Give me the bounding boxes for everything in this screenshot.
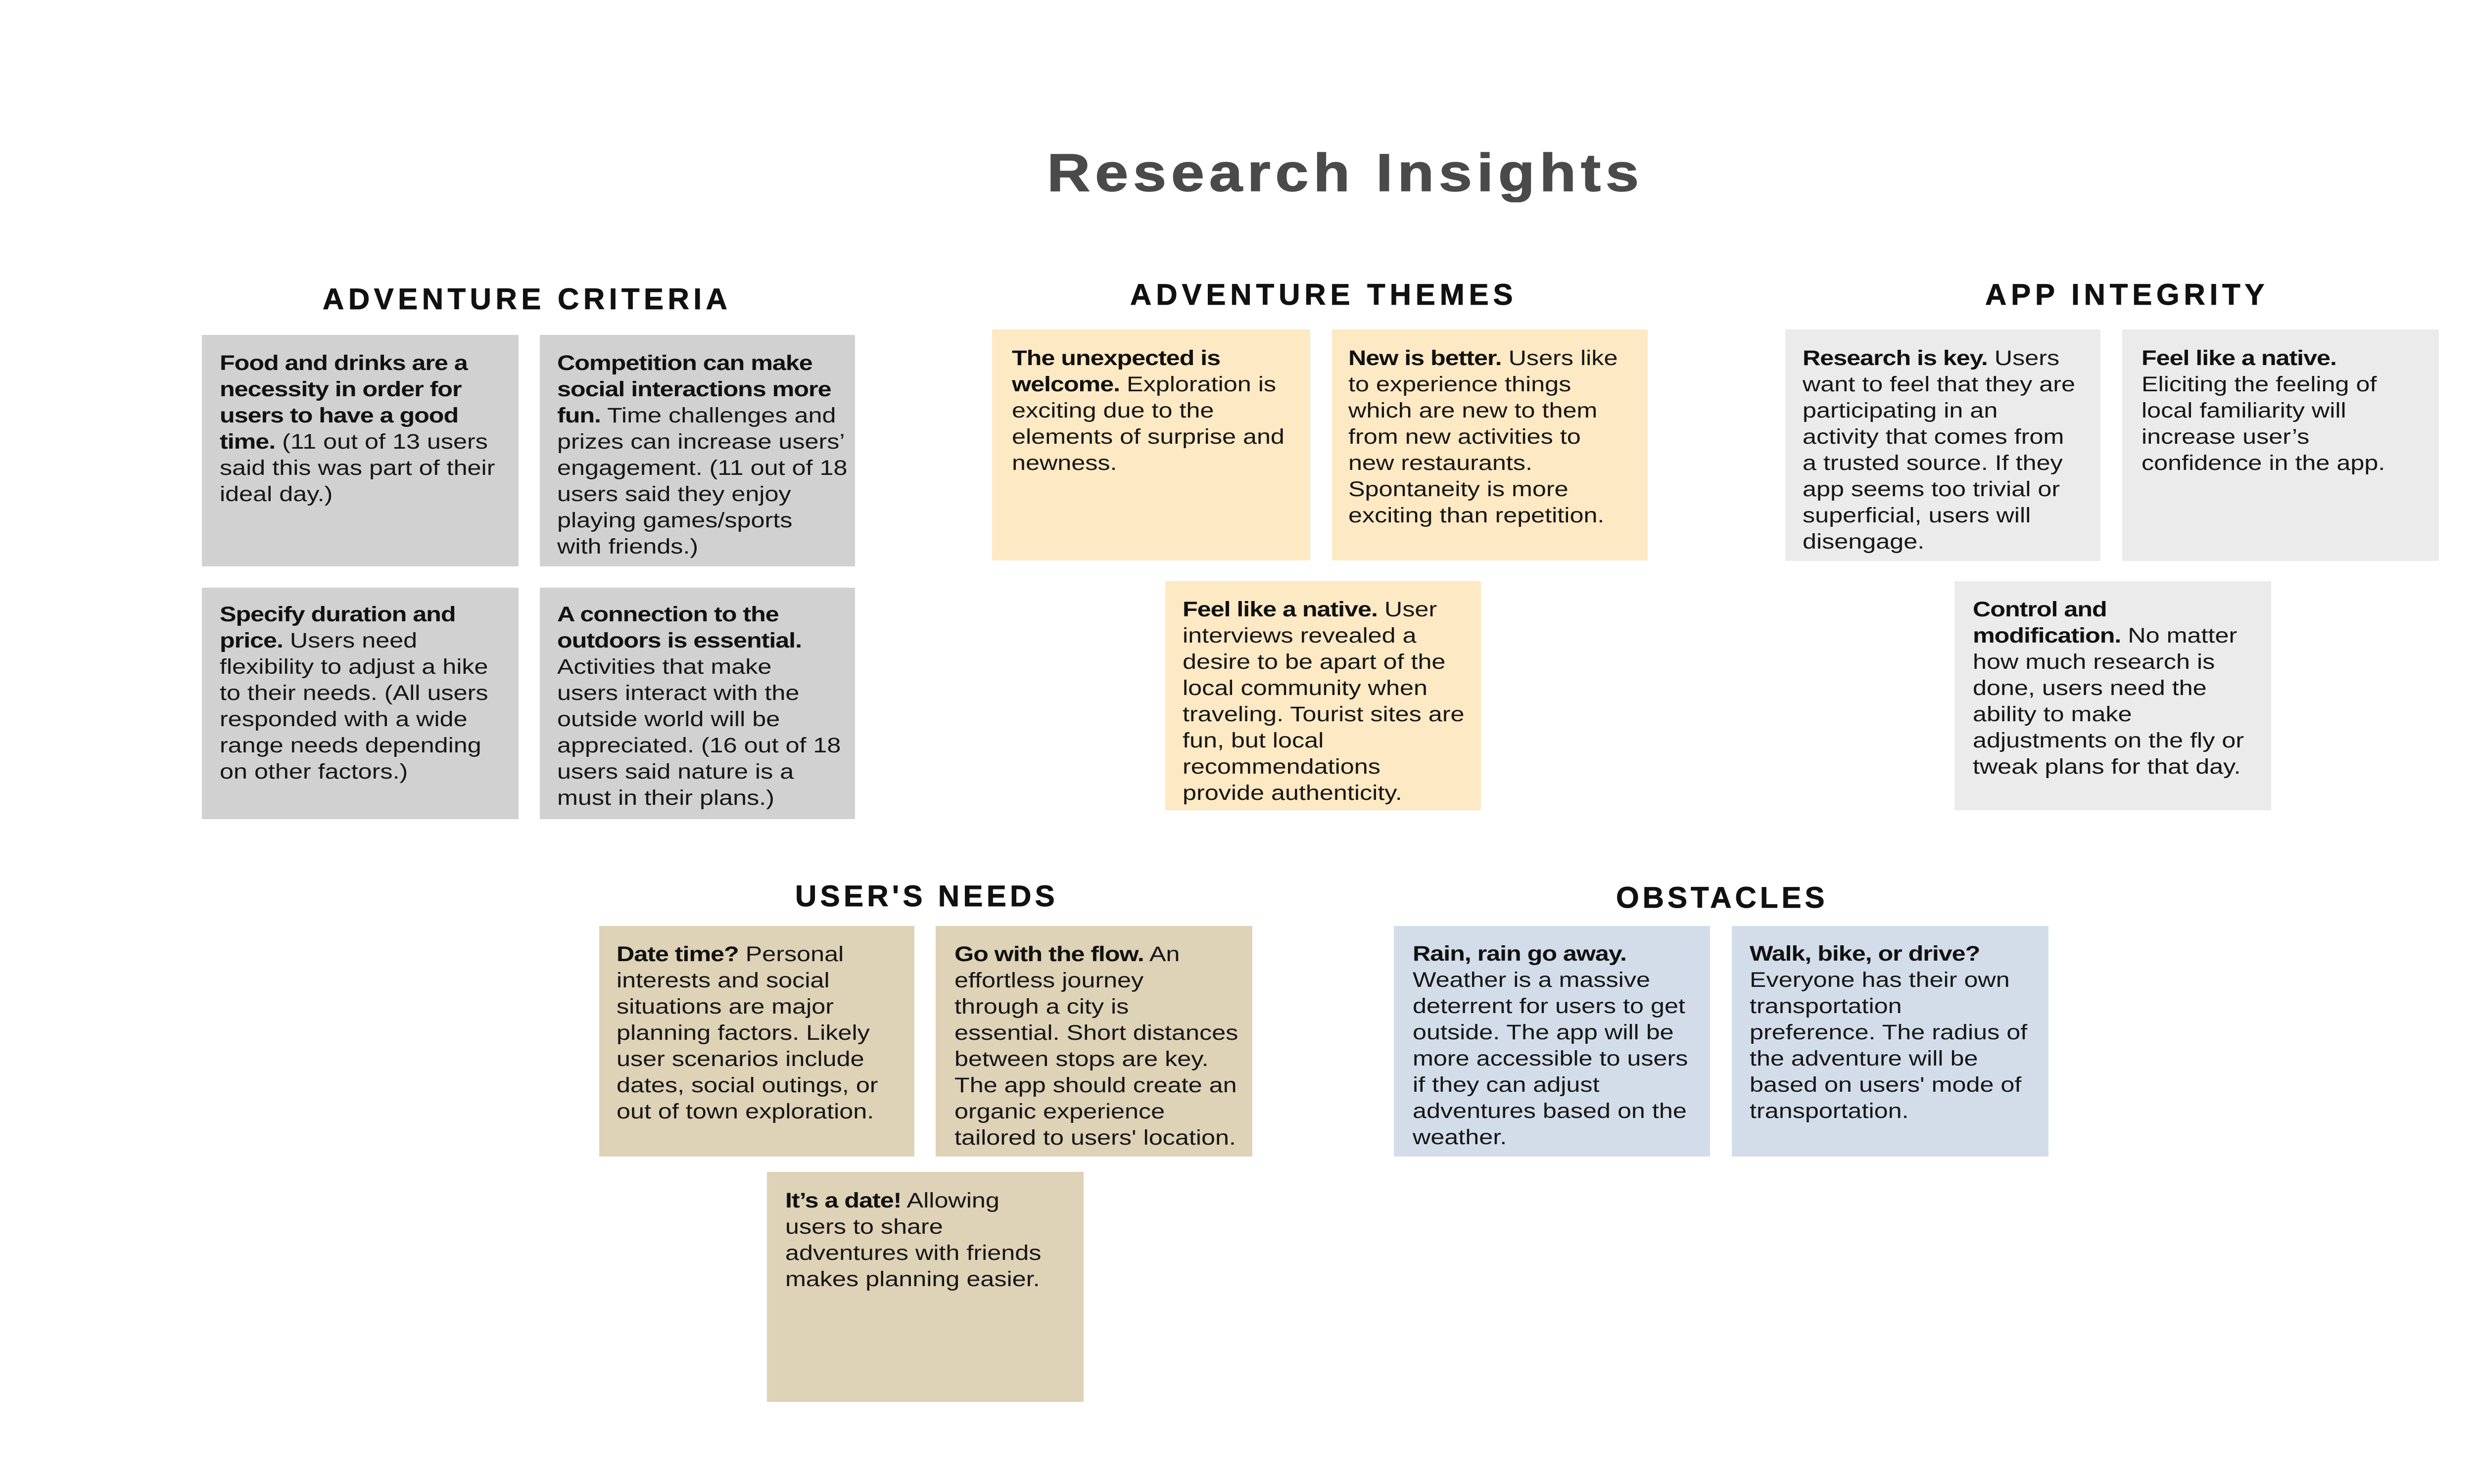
text: food and drinks: ideal day.) [220,482,333,506]
title: Research Insights [1047,142,1644,202]
text: new is better: Spontaneity is more [1348,477,1569,501]
text: new is better: new restaurants. [1348,451,1532,475]
text: new is better: exciting than repetition. [1348,504,1604,527]
heading: obstacles: OBSTACLES [1616,881,1828,914]
text: control and modification: tweak plans for that day. [1973,755,2241,779]
text: it's a date: adventures with friends [785,1241,1041,1265]
card: competition [540,335,855,566]
text: outdoors: must in their plans.) [557,786,774,810]
text: date time: situations are major [617,995,834,1019]
heading: adventure themes: ADVENTURE THEMES [1130,278,1517,311]
card: date time [599,926,914,1157]
heading: user's needs: USER'S NEEDS [795,880,1058,913]
card: feel like a native [2122,329,2439,561]
text: new is better: New is better. Users like [1348,346,1618,370]
text: outdoors: A connection to the [557,603,779,626]
text: it's a date: makes planning easier. [785,1267,1040,1291]
text: walk bike drive [1750,942,2028,1123]
card: outdoors [540,588,855,819]
text: feel like a native: fun, but local [1183,729,1324,752]
text: competition: Competition can make [557,351,812,375]
text: rain: if they can adjust [1413,1073,1600,1097]
text: date time: dates, social outings, or [617,1073,878,1097]
text: walk bike drive: Everyone has their own [1750,968,2010,992]
text: new is better: from new activities to [1348,425,1581,449]
text: new is better: to experience things [1348,372,1571,396]
card: control and modification [1954,581,2271,810]
panel: obstacles [1394,881,2048,1157]
text: competition: playing games/sports [557,509,792,532]
text: competition: with friends.) [557,535,698,558]
heading: app integrity: APP INTEGRITY [1985,278,2269,311]
text: rain: more accessible to users [1413,1047,1688,1070]
text: the unexpected: The unexpected is [1012,346,1220,370]
text: date time: user scenarios include [617,1047,864,1071]
text: food and drinks [220,351,495,506]
text: it's a date [785,1189,1041,1291]
text: feel like a native: desire to be apart of the [1183,650,1445,674]
text: rain: weather. [1413,1125,1507,1149]
text: control and modification: adjustments on the fly or [1973,729,2244,752]
text: feel like a native: increase user’s [2141,425,2309,449]
text: competition: users said they enjoy [557,482,791,506]
card: it's a date [767,1172,1084,1402]
text: research is key [1803,346,2075,554]
text: feel like a native: recommendations [1183,755,1380,779]
text: duration and price: responded with a wide [220,707,468,731]
panel: app integrity [1785,278,2439,810]
text: walk bike drive: transportation. [1750,1099,1909,1123]
text: rain: outside. The app will be [1413,1020,1674,1044]
card: food and drinks [202,335,519,566]
text: go with the flow: The app should create an [954,1073,1237,1097]
text: outdoors [557,603,841,810]
text: outdoors: Activities that make [557,655,771,679]
heading: adventure criteria: ADVENTURE CRITERIA [323,282,731,316]
text: walk bike drive: preference. The radius of [1750,1020,2027,1044]
text: feel like a native: local familiarity will [2141,399,2346,422]
text: feel like a native [2141,346,2385,475]
text: walk bike drive: transportation [1750,994,1902,1018]
text: go with the flow: between stops are key. [954,1047,1209,1071]
text: rain: adventures based on the [1413,1099,1687,1123]
card: new is better [1332,329,1648,560]
text: research is key: a trusted source. If they [1803,451,2063,475]
card: research is key [1785,329,2100,561]
card: feel like a native [1165,581,1481,810]
text: food and drinks: users to have a good [220,404,458,427]
text: date time: Date time? Personal [617,942,844,966]
text: outdoors: users said nature is a [557,760,794,784]
text: duration and price: on other factors.) [220,760,408,784]
text: date time: interests and social [617,969,830,992]
text: research is key: want to feel that they are [1803,372,2075,396]
card: walk bike drive [1732,926,2048,1157]
text: walk bike drive: the adventure will be [1750,1047,1978,1070]
text: feel like a native: local community when [1183,676,1427,700]
text: duration and price: range needs depending [220,734,481,757]
text: research is key: superficial, users will [1803,504,2031,527]
text: it's a date: It’s a date! Allowing [785,1189,999,1212]
panel: adventure criteria [202,282,855,819]
text: feel like a native: confidence in the app. [2141,451,2385,475]
text: go with the flow: effortless journey [954,969,1143,992]
text: walk bike drive: Walk, bike, or drive? [1750,942,1980,966]
panel: adventure themes [992,278,1648,810]
text: duration and price: price. Users need [220,629,417,652]
text: date time: out of town exploration. [617,1100,874,1123]
text: walk bike drive: based on users' mode of [1750,1073,2021,1097]
text: rain: Rain, rain go away. [1413,942,1626,966]
text: outdoors: outside world will be [557,707,780,731]
card: go with the flow [936,926,1252,1157]
text: feel like a native: Feel like a native. [2141,346,2336,370]
text: rain: deterrent for users to get [1413,994,1685,1018]
text: new is better: which are new to them [1348,399,1597,422]
text: competition: social interactions more [557,377,831,401]
text: food and drinks: said this was part of their [220,456,495,480]
text: the unexpected: newness. [1012,451,1117,475]
text: outdoors: users interact with the [557,681,799,705]
text: go with the flow: Go with the flow. An [954,942,1180,966]
card: the unexpected [992,329,1310,560]
text: the unexpected: welcome. Exploration is [1012,372,1276,396]
text: research is key: participating in an [1803,399,1998,422]
text: outdoors: outdoors is essential. [557,629,802,652]
text: control and modification: ability to make [1973,702,2132,726]
text: feel like a native: traveling. Tourist sites are [1183,702,1465,726]
text: rain: Weather is a massive [1413,968,1650,992]
text: food and drinks: necessity in order for [220,377,461,401]
text: control and modification: Control and [1973,598,2107,621]
text: research is key: activity that comes from [1803,425,2064,449]
text: competition: engagement. (11 out of 18 [557,456,847,480]
text: control and modification [1973,598,2244,779]
text: rain [1413,942,1688,1149]
text: the unexpected [1011,346,1285,475]
text: competition [557,351,847,558]
text: food and drinks: Food and drinks are a [220,351,468,375]
text: go with the flow: essential. Short distances [954,1021,1238,1045]
text: new is better [1348,346,1618,527]
text: feel like a native: interviews revealed a [1183,624,1417,648]
text: research is key: Research is key. Users [1803,346,2059,370]
text: go with the flow: tailored to users' location. [954,1126,1236,1150]
text: go with the flow: organic experience [954,1100,1165,1123]
text: the unexpected: exciting due to the [1012,399,1214,422]
text: duration and price: to their needs. (All users [220,681,488,705]
card: duration and price [202,588,519,819]
text: feel like a native: Feel like a native. User [1183,598,1437,621]
text: research is key: app seems too trivial or [1803,477,2060,501]
text: date time [617,942,878,1123]
text: duration and price: flexibility to adjust a hike [220,655,488,679]
text: outdoors: appreciated. (16 out of 18 [557,734,841,757]
text: competition: fun. Time challenges and [557,404,836,427]
text: duration and price: Specify duration and [220,603,456,626]
text: the unexpected: elements of surprise and [1012,425,1285,449]
text: control and modification: how much research is [1973,650,2215,674]
text: food and drinks: time. (11 out of 13 users [220,430,488,454]
card: rain [1394,926,1710,1157]
text: go with the flow: through a city is [954,995,1129,1019]
text: date time: planning factors. Likely [617,1021,870,1045]
text: control and modification: modification. No matter [1973,624,2237,648]
text: duration and price [220,603,488,784]
text: it's a date: users to share [785,1215,943,1239]
text: feel like a native: Eliciting the feeling of [2141,372,2377,396]
text: research is key: disengage. [1803,530,1924,554]
text: competition: prizes can increase users’ [557,430,845,454]
text: go with the flow [954,942,1238,1150]
text: feel like a native [1183,598,1465,805]
text: control and modification: done, users need the [1973,676,2207,700]
text: feel like a native: provide authenticity. [1183,781,1402,805]
panel: user's needs [599,880,1252,1402]
